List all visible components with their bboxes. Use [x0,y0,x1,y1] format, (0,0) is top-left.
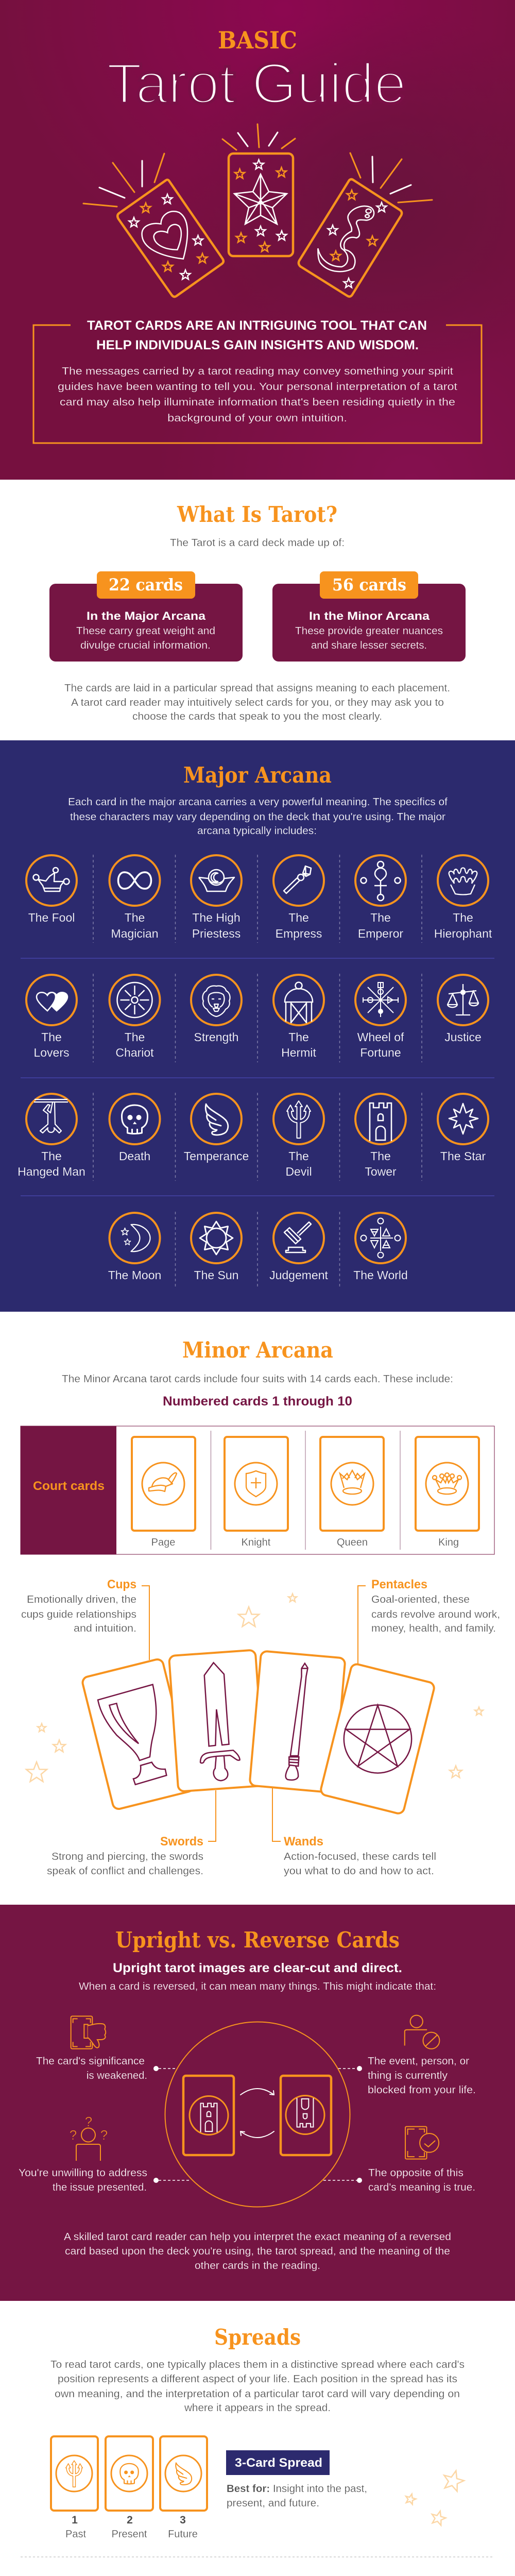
card icon: The Sun [191,1213,242,1282]
card icon: Justice: Justice [444,1030,482,1044]
heading: HELP INDIVIDUALS GAIN INSIGHTS AND WISDOM. [96,338,419,352]
card icon: The Star [438,1094,488,1163]
illustration: suit cards fan [81,1650,435,1815]
callout: Cups: Cups [107,1578,136,1591]
heading [87,318,427,352]
card 1 Past: 1 [72,2514,78,2526]
court card: Page: Page [151,1537,175,1548]
arrows [241,2089,274,2138]
text: reversed intro: When a card is reversed, it can mean many things. This might indicate that: [79,1981,436,1992]
panel: 56 cards: 56 cards [332,575,406,595]
panel: Major Arcana background [0,740,515,1312]
court card: King [416,1437,479,1548]
text: major arcana intro [68,796,448,837]
card: heart [117,180,224,297]
court card: King: King [438,1537,459,1548]
panel: 56 cards: In the Minor Arcana [309,609,430,622]
card: snake [299,179,402,297]
card icon: Judgement: Judgement [269,1268,329,1282]
icon: person blocked [405,2015,439,2049]
card: cups [81,1658,195,1810]
callout: Cups: and intuition. [74,1623,136,1634]
card icon: The Hermit: The [288,1030,309,1044]
card icon: The Fool [26,855,77,924]
callout: opposite: The opposite of this [368,2167,464,2179]
card icon: The Lovers: The [41,1030,62,1044]
icon: card with check [405,2127,439,2159]
card icon: The Chariot [109,975,160,1059]
callout: Pentacles: Pentacles [371,1578,427,1591]
divider [21,2557,492,2576]
heading: Minor Arcana: Minor Arcana [182,1337,333,1363]
diagram: reversed card cycle [165,2022,350,2207]
rays [83,124,432,207]
title [107,26,406,115]
card icon: The Hermit [273,975,324,1059]
card icon: Strength [191,975,242,1044]
card: swords [169,1650,265,1792]
court card: Page [132,1437,195,1548]
label: 3-Card Spread: 3-Card Spread [235,2456,322,2470]
text: spreads intro [50,2359,465,2414]
card icon: The Chariot: The [125,1030,145,1044]
card icon: The Emperor: Emperor [358,927,403,940]
text: skilled reader: A skilled tarot card reader can help you interpret the exact meaning of a reversed [64,2231,451,2243]
panel: header background [0,0,515,480]
panel: 22 cards [49,571,243,662]
card icon: The Fool: The Fool [28,911,75,924]
text: spreads intro: where it appears in the spread. [184,2402,331,2414]
card: wands [249,1651,346,1793]
card icon: The World: The World [353,1268,408,1282]
text: skilled reader: card based upon the deck you're using, the tarot spread, and the meaning of the [65,2246,450,2257]
text: major arcana intro: arcana typically includes: [197,825,317,837]
text: spreads intro: To read tarot cards, one typically places them in a distinctive spread where each card's [50,2359,465,2370]
card icon: The Empress: Empress [276,927,322,940]
heading: Spreads: Spreads [214,2325,301,2350]
card icon: The Lovers [26,975,77,1059]
icon: person with question marks [70,2114,108,2161]
callout: Swords: Swords [160,1835,203,1849]
text: minor arcana intro: The Minor Arcana tarot cards include four suits with 14 cards each. These include: [62,1374,453,1385]
text block: The messages carried by a tarot reading may convey something your spirit [62,366,454,377]
court card: Knight [225,1437,288,1548]
card icon: The High Priestess: The High [192,911,241,924]
card icon: Temperance: Temperance [184,1149,249,1163]
diagram: 3-card spread [51,2436,207,2540]
card 1 Past: Past [65,2529,86,2540]
card icon: The World [353,1213,408,1282]
heading: Major Arcana: Major Arcana [183,762,332,788]
callout: unwilling [19,2167,191,2193]
callout: Cups: Emotionally driven, the [27,1594,136,1605]
label: 3-Card Spread: present, and future. [227,2498,319,2509]
card icon: Judgement [269,1213,329,1282]
card icon: The Tower [355,1094,406,1178]
text: major arcana intro: Each card in the major arcana carries a very powerful meaning. The specifics of [68,796,448,808]
callout: Cups: cups guide relationships [21,1609,136,1620]
card icon: The Hanged Man: The [41,1149,62,1163]
text: spread paragraph: choose the cards that speak to you the most clearly. [132,711,382,722]
callout: Swords: speak of conflict and challenges. [47,1866,203,1877]
card icon: The Emperor: The [370,911,391,924]
card icon: The Hierophant [434,855,492,940]
label: 3-Card Spread: Best for: Insight into the past, [227,2483,367,2495]
panel: intro frame [33,318,482,443]
panel: 56 cards: and share lesser secrets. [311,640,427,651]
text: spread paragraph: A tarot card reader may intuitively select cards for you, or they may ask you to [71,697,444,708]
card: reversed tower [281,2076,331,2155]
title: Tarot Guide [107,52,406,115]
card icon: The Magician [109,855,160,940]
card 2 Present [106,2436,153,2540]
card icon: The Lovers: Lovers [33,1046,70,1059]
text: spread paragraph [64,683,450,722]
callout: Cups [21,1578,149,1660]
callout: unwilling: You're unwilling to address [19,2167,147,2179]
card icon: The Devil [273,1094,324,1178]
card icon: The Devil: Devil [285,1165,312,1178]
callout: blocked: blocked from your life. [368,2084,476,2096]
callout: opposite: card's meaning is true. [368,2182,475,2193]
icon: person with question marks: ? [70,2127,77,2143]
card 2 Present: Present [112,2529,147,2540]
card icon: Justice [438,975,488,1044]
callout: Wands: Action-focused, these cards tell [284,1851,436,1862]
callout: Wands [272,1788,436,1877]
card icon: The Emperor [355,855,406,940]
text: spreads intro: position represents a different aspect of your life. Each position in the spread has its [58,2374,457,2385]
panel: 56 cards [272,571,466,662]
card icon: The Hanged Man: Hanged Man [18,1165,85,1178]
panel: court cards table: Court cards [33,1479,105,1493]
title: BASIC [218,26,297,54]
text: spreads intro: own meaning, and the interpretation of a particular tarot card will vary depending on [55,2388,460,2400]
panel: 22 cards: divulge crucial information. [80,640,211,651]
callout: unwilling: the issue presented. [53,2182,147,2193]
card icon: The Hierophant: Hierophant [434,927,492,940]
court card: Knight: Knight [242,1537,271,1548]
card icon: The Magician: Magician [111,927,159,940]
panel: 22 cards: 22 cards [109,575,183,595]
card icon: Wheel of Fortune: Wheel of [357,1030,404,1044]
callout: significance weakened: is weakened. [87,2070,147,2081]
card icon: The Tower: The [370,1149,391,1163]
panel: court cards table [21,1426,494,1554]
card icon: The Magician: The [125,911,145,924]
icon: card thumbs down [71,2016,106,2049]
court card: Queen [320,1437,384,1548]
callout: Pentacles [358,1578,500,1664]
card: pentacles [320,1663,435,1815]
card icon: The Moon: The Moon [108,1268,161,1282]
callout: significance weakened [36,2056,177,2081]
text block: card may also help illuminate information that's been residing quietly in the [60,397,455,408]
subheading: Upright tarot images are clear-cut and direct. [113,1961,402,1975]
card icon: The Sun: The Sun [194,1268,238,1282]
callout: Swords [47,1790,216,1877]
callout: blocked: thing is currently [368,2070,448,2081]
text block: guides have been wanting to tell you. Your personal interpretation of a tarot [58,381,458,393]
icon: person with question marks: ? [85,2114,92,2129]
heading: TAROT CARDS ARE AN INTRIGUING TOOL THAT CAN [87,318,427,333]
card: upright tower [183,2076,234,2155]
card icon: The Empress [273,855,324,940]
court card: Queen: Queen [337,1537,368,1548]
panel: 22 cards: In the Major Arcana [87,609,206,622]
callout: Swords: Strong and piercing, the swords [52,1851,203,1862]
text: major arcana intro: these characters may vary depending on the deck that you're using. The major [70,811,445,823]
dividers [21,855,494,1286]
card icon: The High Priestess: Priestess [192,927,241,940]
callout: Wands: Wands [284,1835,323,1849]
icon: person with question marks: ? [100,2127,108,2143]
small stars [129,160,386,287]
callout: Pentacles: cards revolve around work, [371,1609,500,1620]
card icon: The Star: The Star [440,1149,486,1163]
card 3 Future [160,2436,207,2540]
card 1 Past [51,2436,98,2540]
card 3 Future: 3 [180,2514,186,2526]
callout: Pentacles: Goal-oriented, these [371,1594,470,1605]
text: spread paragraph: The cards are laid in a particular spread that assigns meaning to each placement. [64,683,450,694]
text: deck intro: The Tarot is a card deck made up of: [170,537,345,549]
card icon: Temperance [184,1094,249,1163]
card: star [229,154,293,256]
callout: Wands: you what to do and how to act. [284,1866,434,1877]
card icon: Strength: Strength [194,1030,238,1044]
callout: blocked: The event, person, or [368,2056,469,2067]
card icon: Wheel of Fortune: Fortune [360,1046,401,1059]
card icon: The High Priestess [191,855,242,940]
panel: 22 cards: These carry great weight and [76,625,215,637]
text block [58,366,458,424]
text: skilled reader: other cards in the reading. [195,2260,320,2272]
card icon: The Empress: The [288,911,309,924]
callout: opposite [323,2167,475,2193]
label: 3-Card Spread [226,2450,367,2509]
panel: Upright vs Reverse background [0,1905,515,2301]
heading: What Is Tarot?: What Is Tarot? [177,502,337,527]
card icon: The Devil: The [288,1149,309,1163]
card icon: The Moon [108,1213,161,1282]
text: skilled reader [64,2231,451,2272]
card icon: Wheel of Fortune [355,975,406,1059]
card icon: The Tower: Tower [365,1165,397,1178]
card icon: Death: Death [119,1149,150,1163]
decorative stars: suits [26,1594,483,1782]
text block: background of your own intuition. [167,413,347,424]
text: numbered cards: Numbered cards 1 through 10 [163,1394,352,1409]
decorative stars: 3-card [404,2468,466,2526]
card icon: The Hanged Man [18,1094,85,1178]
card 2 Present: 2 [127,2514,133,2526]
panel: 56 cards: These provide greater nuances [295,625,443,637]
callout: significance weakened: The card's significance [36,2056,145,2067]
callout: Pentacles: money, health, and family. [371,1623,496,1634]
card icon: The Hermit: Hermit [281,1046,316,1059]
illustration: three tarot cards [83,124,432,297]
card icon: Death [109,1094,160,1163]
card icon: The Chariot: Chariot [115,1046,154,1059]
card 3 Future: Future [168,2529,198,2540]
heading: Upright vs. Reverse Cards: Upright vs. Reverse Cards [115,1927,400,1953]
card icon: The Hierophant: The [453,911,473,924]
callout: blocked [338,2056,476,2096]
